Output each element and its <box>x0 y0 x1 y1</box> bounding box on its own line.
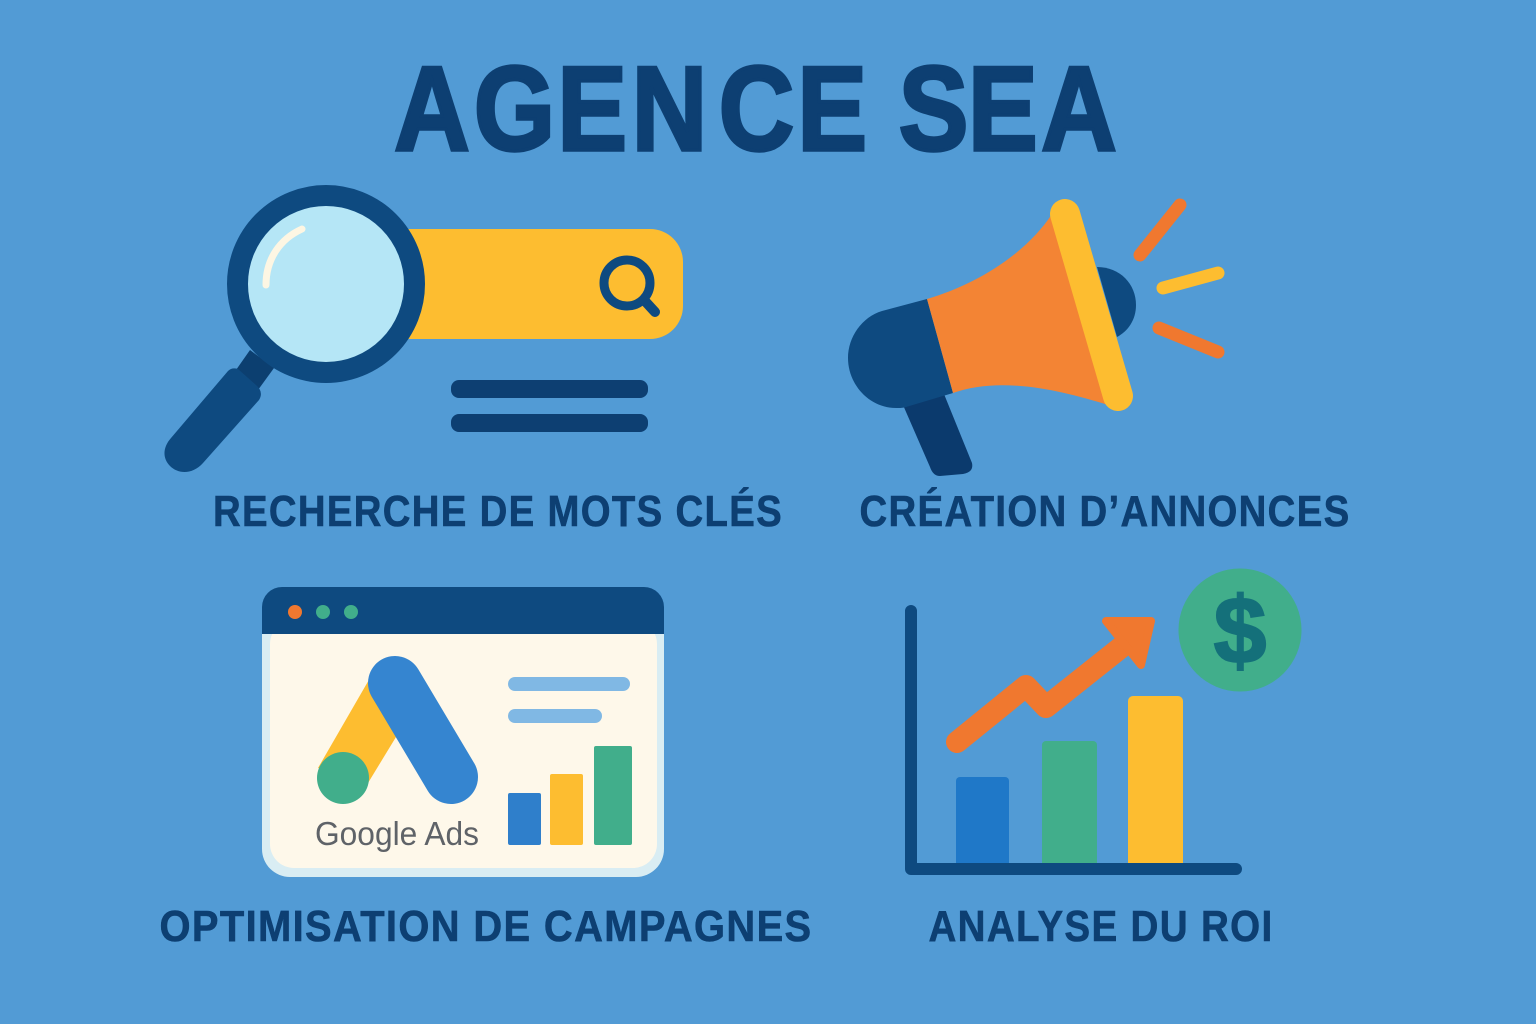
panel: ROI analysis <box>911 568 1302 951</box>
browser window <box>262 587 664 877</box>
icon: Google Ads logo <box>315 678 479 852</box>
icon: search bar <box>400 229 683 339</box>
icon: dollar coin <box>1178 568 1302 692</box>
panel: keyword research <box>164 196 783 536</box>
bar chart: campaign <box>508 746 632 845</box>
icon: sound rays <box>1140 205 1218 352</box>
heading: ad creation: CRÉATION D’ANNONCES <box>860 486 1350 536</box>
text lines <box>451 380 648 432</box>
heading: keyword research: RECHERCHE DE MOTS CLÉS <box>213 486 783 536</box>
heading: ROI analysis: ANALYSE DU ROI <box>928 902 1274 951</box>
panel: campaign optimisation <box>160 587 812 951</box>
icon: magnifying glass <box>164 196 414 472</box>
bar chart: ROI <box>956 696 1183 863</box>
icon: megaphone <box>848 205 1218 476</box>
text lines <box>508 677 630 723</box>
heading: campaign optimisation: OPTIMISATION DE CAMPAGNES <box>160 902 812 951</box>
icon: dollar coin: $ <box>1214 578 1266 684</box>
title: AGENCE SEA <box>394 41 1117 176</box>
panel: ad creation <box>848 205 1350 536</box>
chart axes <box>911 611 1236 869</box>
icon: Google Ads logo: Google Ads <box>315 815 479 852</box>
icon: growth arrow <box>957 621 1151 742</box>
